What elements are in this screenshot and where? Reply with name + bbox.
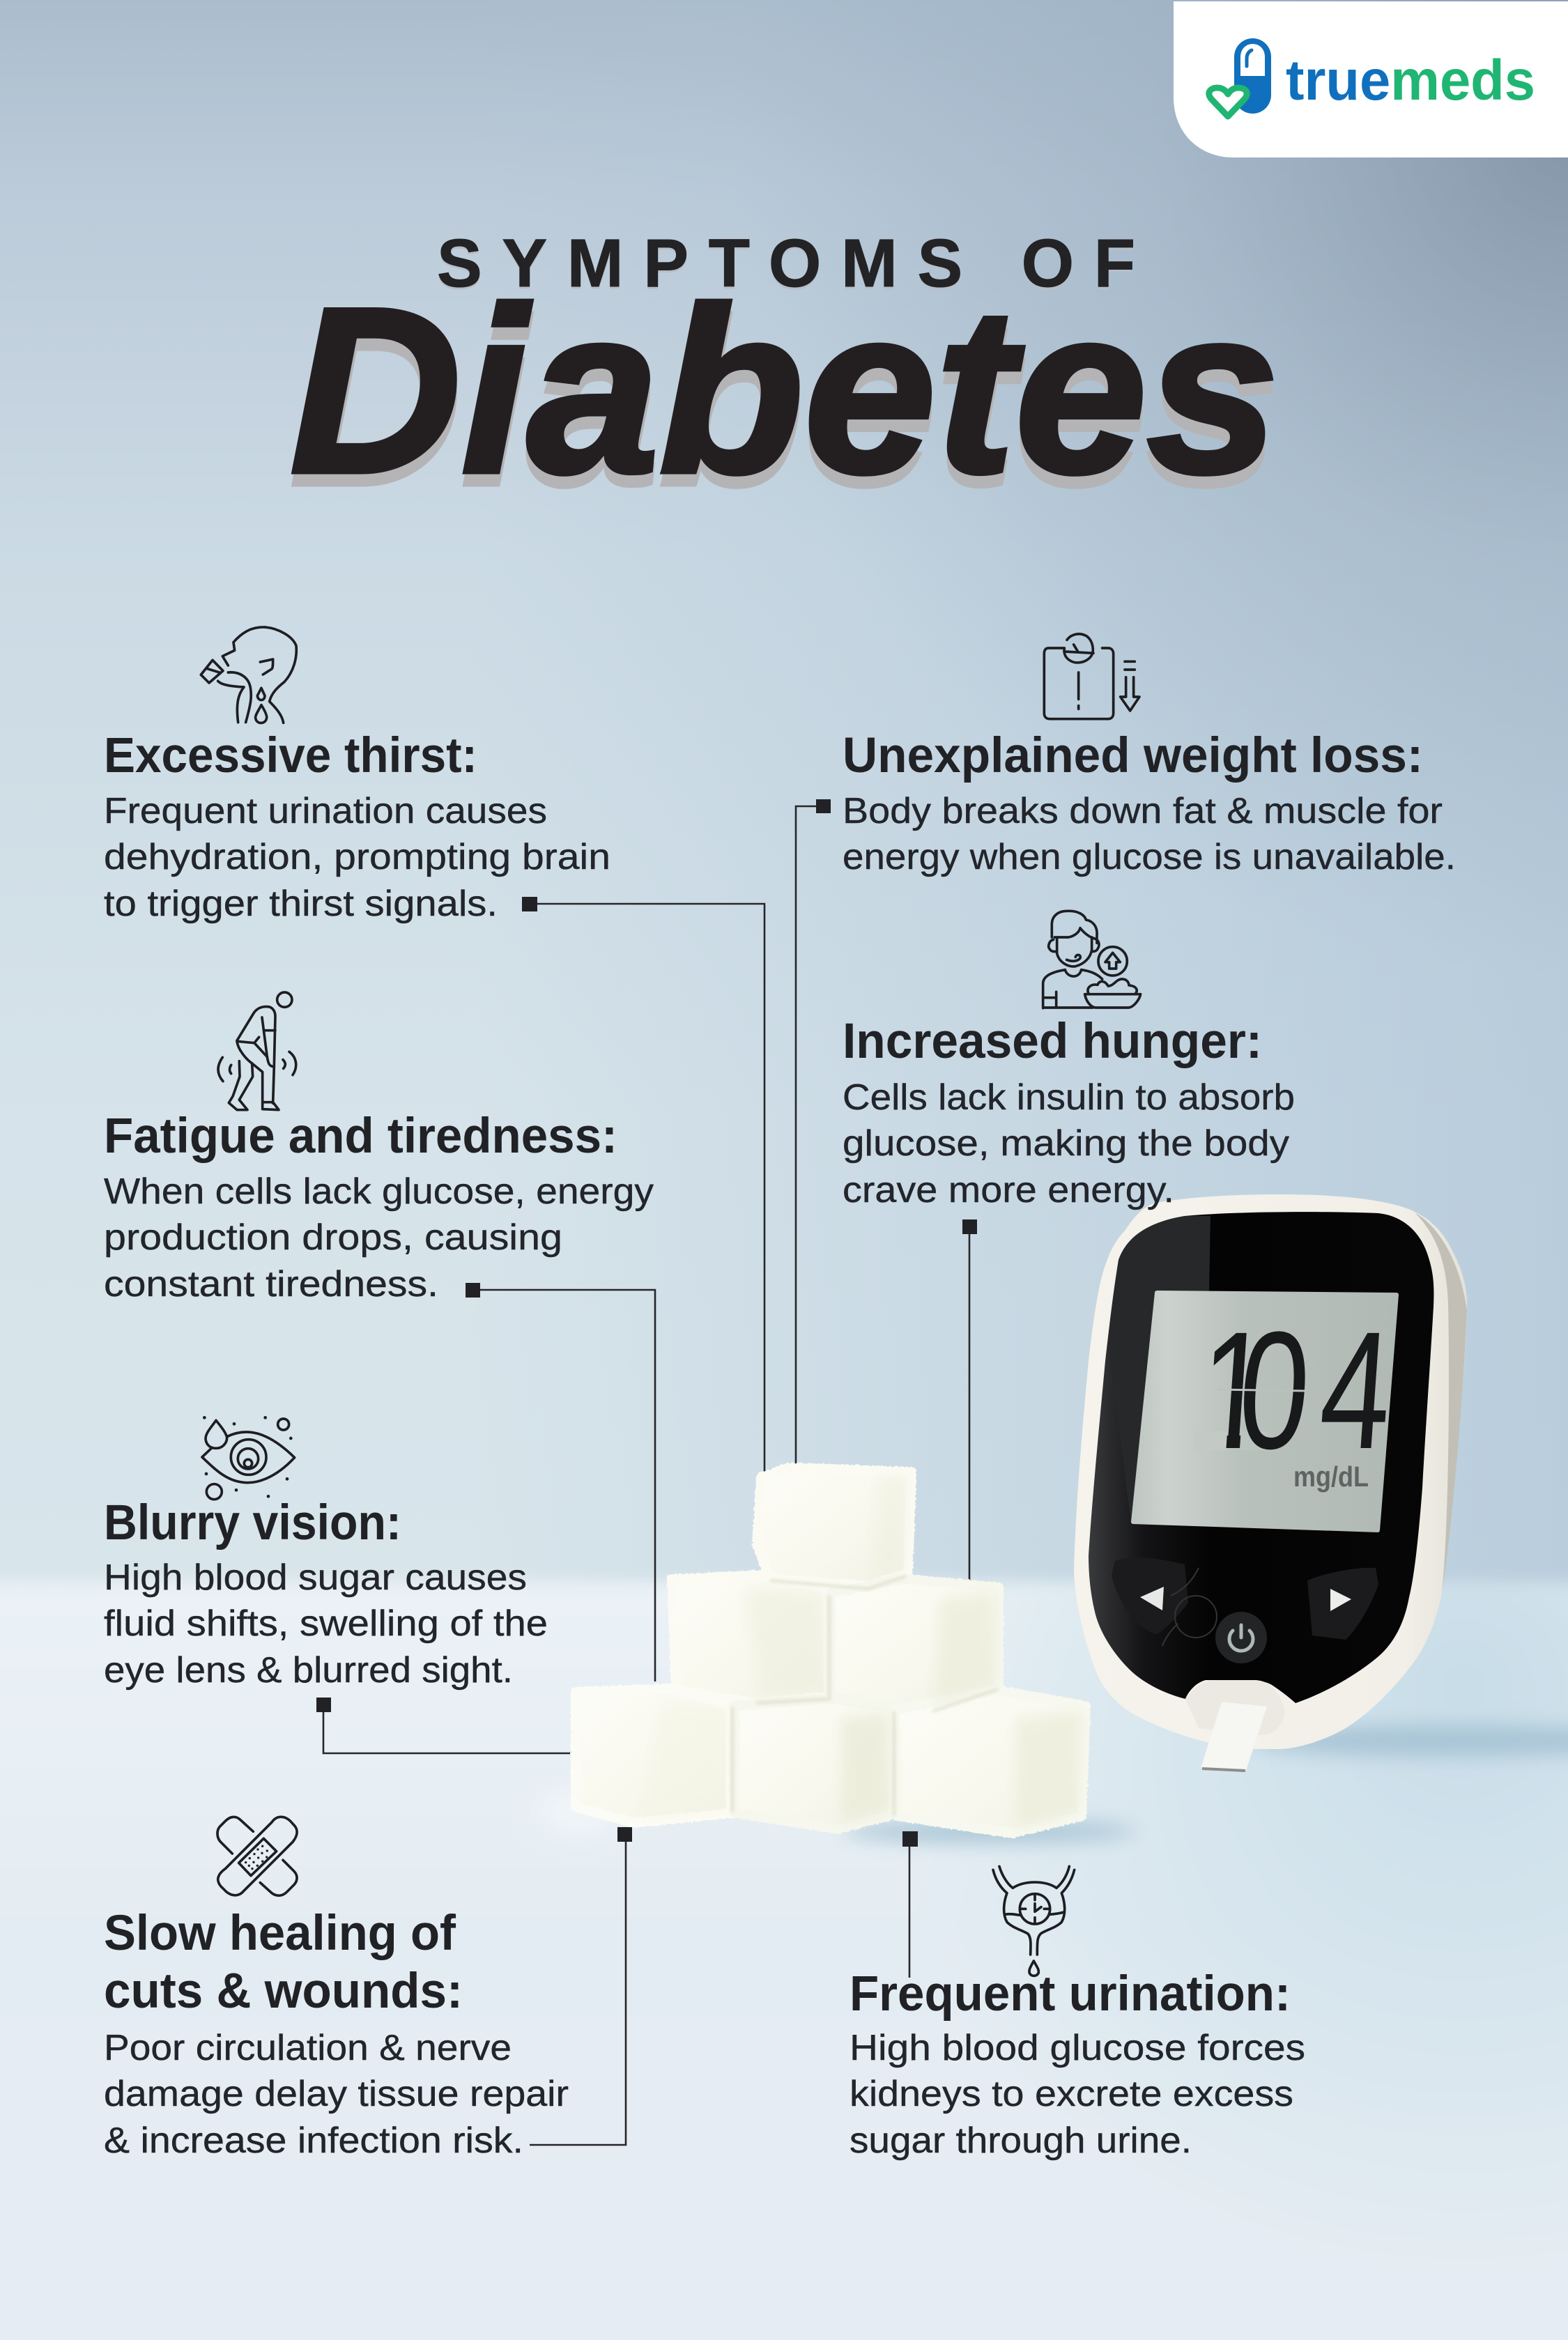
heading: Blurry vision: (104, 1495, 401, 1550)
heading (104, 1906, 463, 2019)
panel: unexplained weight loss (843, 634, 1456, 877)
meter LCD screen (1133, 1293, 1397, 1530)
cube: middle right (831, 1579, 999, 1709)
description: eye lens & blurred sight. (104, 1650, 513, 1691)
description: constant tiredness. (104, 1264, 438, 1304)
cube: bottom right (895, 1690, 1086, 1833)
panel: blurry vision (104, 1416, 548, 1691)
description: Frequent urination causes (104, 791, 547, 831)
description: sugar through urine. (850, 2120, 1192, 2161)
description: fluid shifts, swelling of the (104, 1603, 548, 1644)
heading: Increased hunger: (843, 1014, 1262, 1069)
title main word: Diabetes: Diabetes (290, 259, 1279, 522)
meter shell (1074, 1194, 1467, 1749)
cube: middle left (672, 1575, 829, 1703)
cube: bottom middle (735, 1699, 893, 1829)
description: kidneys to excrete excess (850, 2074, 1293, 2114)
cube: bottom left (576, 1688, 730, 1823)
description: High blood sugar causes (104, 1557, 527, 1598)
cube: top (757, 1468, 912, 1586)
meter reading: 04 (1233, 1298, 1397, 1484)
heading: Slow healing of (104, 1906, 456, 1961)
icon: capsule with heart (1209, 38, 1271, 116)
meter buttons (1112, 1557, 1378, 1663)
description: glucose, making the body (843, 1123, 1289, 1164)
description: Poor circulation & nerve (104, 2028, 512, 2068)
panel: fatigue and tiredness (104, 992, 654, 1304)
description (104, 2028, 569, 2161)
icon: bladder with clock (993, 1866, 1075, 1976)
description: production drops, causing (104, 1217, 562, 1258)
glucose meter (1074, 1194, 1467, 1771)
heading: Excessive thirst: (104, 728, 477, 783)
description: crave more energy. (843, 1170, 1174, 1210)
description (843, 1077, 1295, 1210)
heading: Fatigue and tiredness: (104, 1109, 617, 1164)
title line: symptoms of: SYMPTOMS OF (437, 225, 1135, 301)
description: dehydration, prompting brain (104, 837, 610, 877)
panel: frequent urination (850, 1866, 1305, 2161)
meter unit: mg/dL (1293, 1461, 1369, 1493)
logo wordmark: truemeds (1286, 49, 1535, 112)
panel: increased hunger (843, 911, 1295, 1210)
icon: crossed bandages (217, 1817, 297, 1895)
connector lines (316, 799, 977, 2145)
meter reading: 1 (1193, 1298, 1276, 1484)
logo panel: truemeds (1174, 1, 1568, 157)
title (290, 225, 1279, 522)
icon: eye with tear (202, 1416, 295, 1500)
test strip (1202, 1703, 1266, 1769)
description (104, 791, 610, 924)
icon: weighing scale with arrow (1044, 634, 1139, 719)
description: damage delay tissue repair (104, 2074, 569, 2114)
description: High blood glucose forces (850, 2028, 1305, 2068)
description: to trigger thirst signals. (104, 884, 498, 924)
description: Body breaks down fat & muscle for (843, 791, 1443, 831)
icon: hungry person with bowl (1043, 911, 1141, 1008)
heading: Frequent urination: (850, 1966, 1291, 2022)
sugar cubes (576, 1468, 1086, 1833)
heading: cuts & wounds: (104, 1964, 463, 2019)
icon: tired figure (218, 992, 296, 1110)
heading: Unexplained weight loss: (843, 728, 1423, 783)
description (104, 1557, 548, 1691)
meter black face (1089, 1212, 1434, 1703)
description: energy when glucose is unavailable. (843, 837, 1456, 877)
description (104, 1171, 654, 1304)
panel: slow healing (104, 1817, 569, 2161)
shadows on table (537, 1725, 1568, 1842)
description: & increase infection risk. (104, 2120, 523, 2161)
description: Cells lack insulin to absorb (843, 1077, 1295, 1118)
meter strip port (1185, 1680, 1285, 1735)
description (850, 2028, 1305, 2161)
description (843, 791, 1456, 877)
panel: excessive thirst (104, 627, 610, 924)
description: When cells lack glucose, energy (104, 1171, 654, 1212)
icon: person drinking (201, 627, 296, 723)
